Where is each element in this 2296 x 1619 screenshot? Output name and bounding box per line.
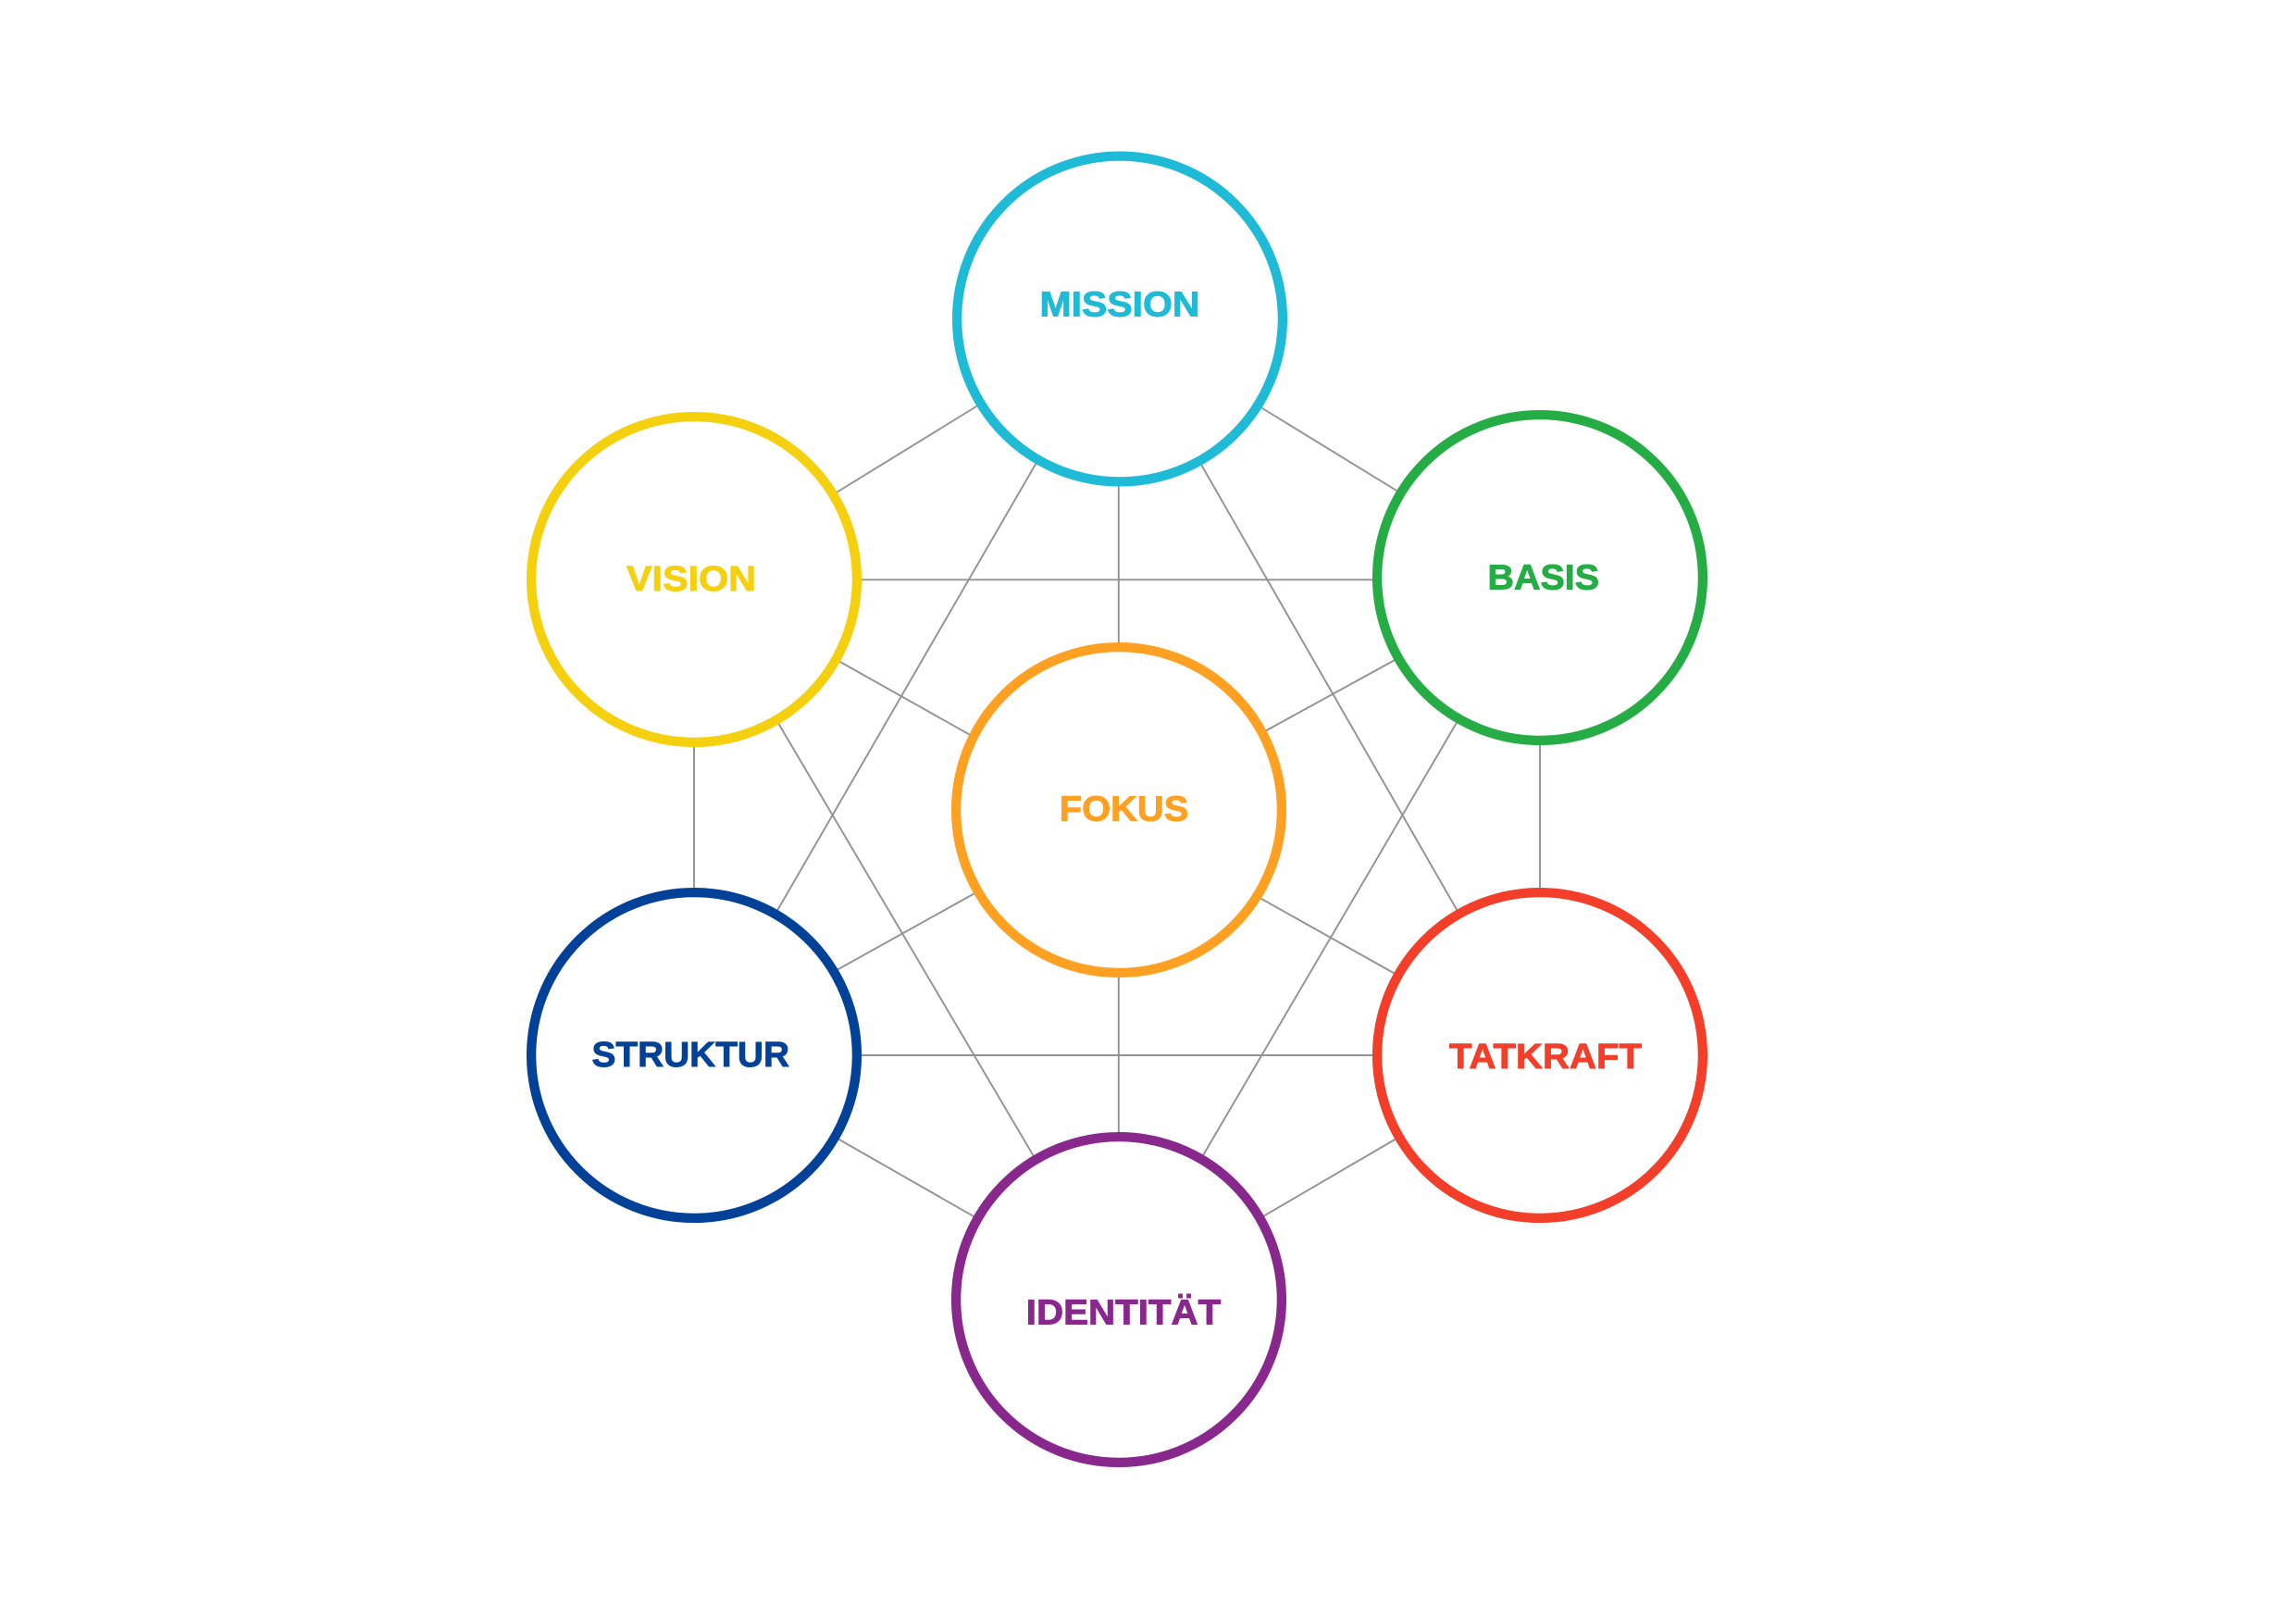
node: MISSION: [957, 156, 1283, 481]
node: BASIS: [1377, 415, 1703, 741]
label: FOKUS: FOKUS: [1060, 789, 1188, 829]
node: IDENTITÄT: [956, 1137, 1282, 1463]
label: STRUKTUR: STRUKTUR: [592, 1035, 789, 1075]
node: TATKRAFT: [1377, 892, 1703, 1218]
label: MISSION: MISSION: [1040, 285, 1199, 324]
node: FOKUS: [956, 647, 1282, 973]
label: IDENTITÄT: IDENTITÄT: [1026, 1292, 1221, 1333]
connecting lines between circles: [694, 405, 1540, 1218]
node: STRUKTUR: [531, 892, 857, 1218]
label: BASIS: BASIS: [1488, 557, 1599, 598]
node: VISION: [531, 417, 857, 742]
label: TATKRAFT: TATKRAFT: [1449, 1037, 1642, 1077]
label: VISION: VISION: [627, 559, 756, 599]
